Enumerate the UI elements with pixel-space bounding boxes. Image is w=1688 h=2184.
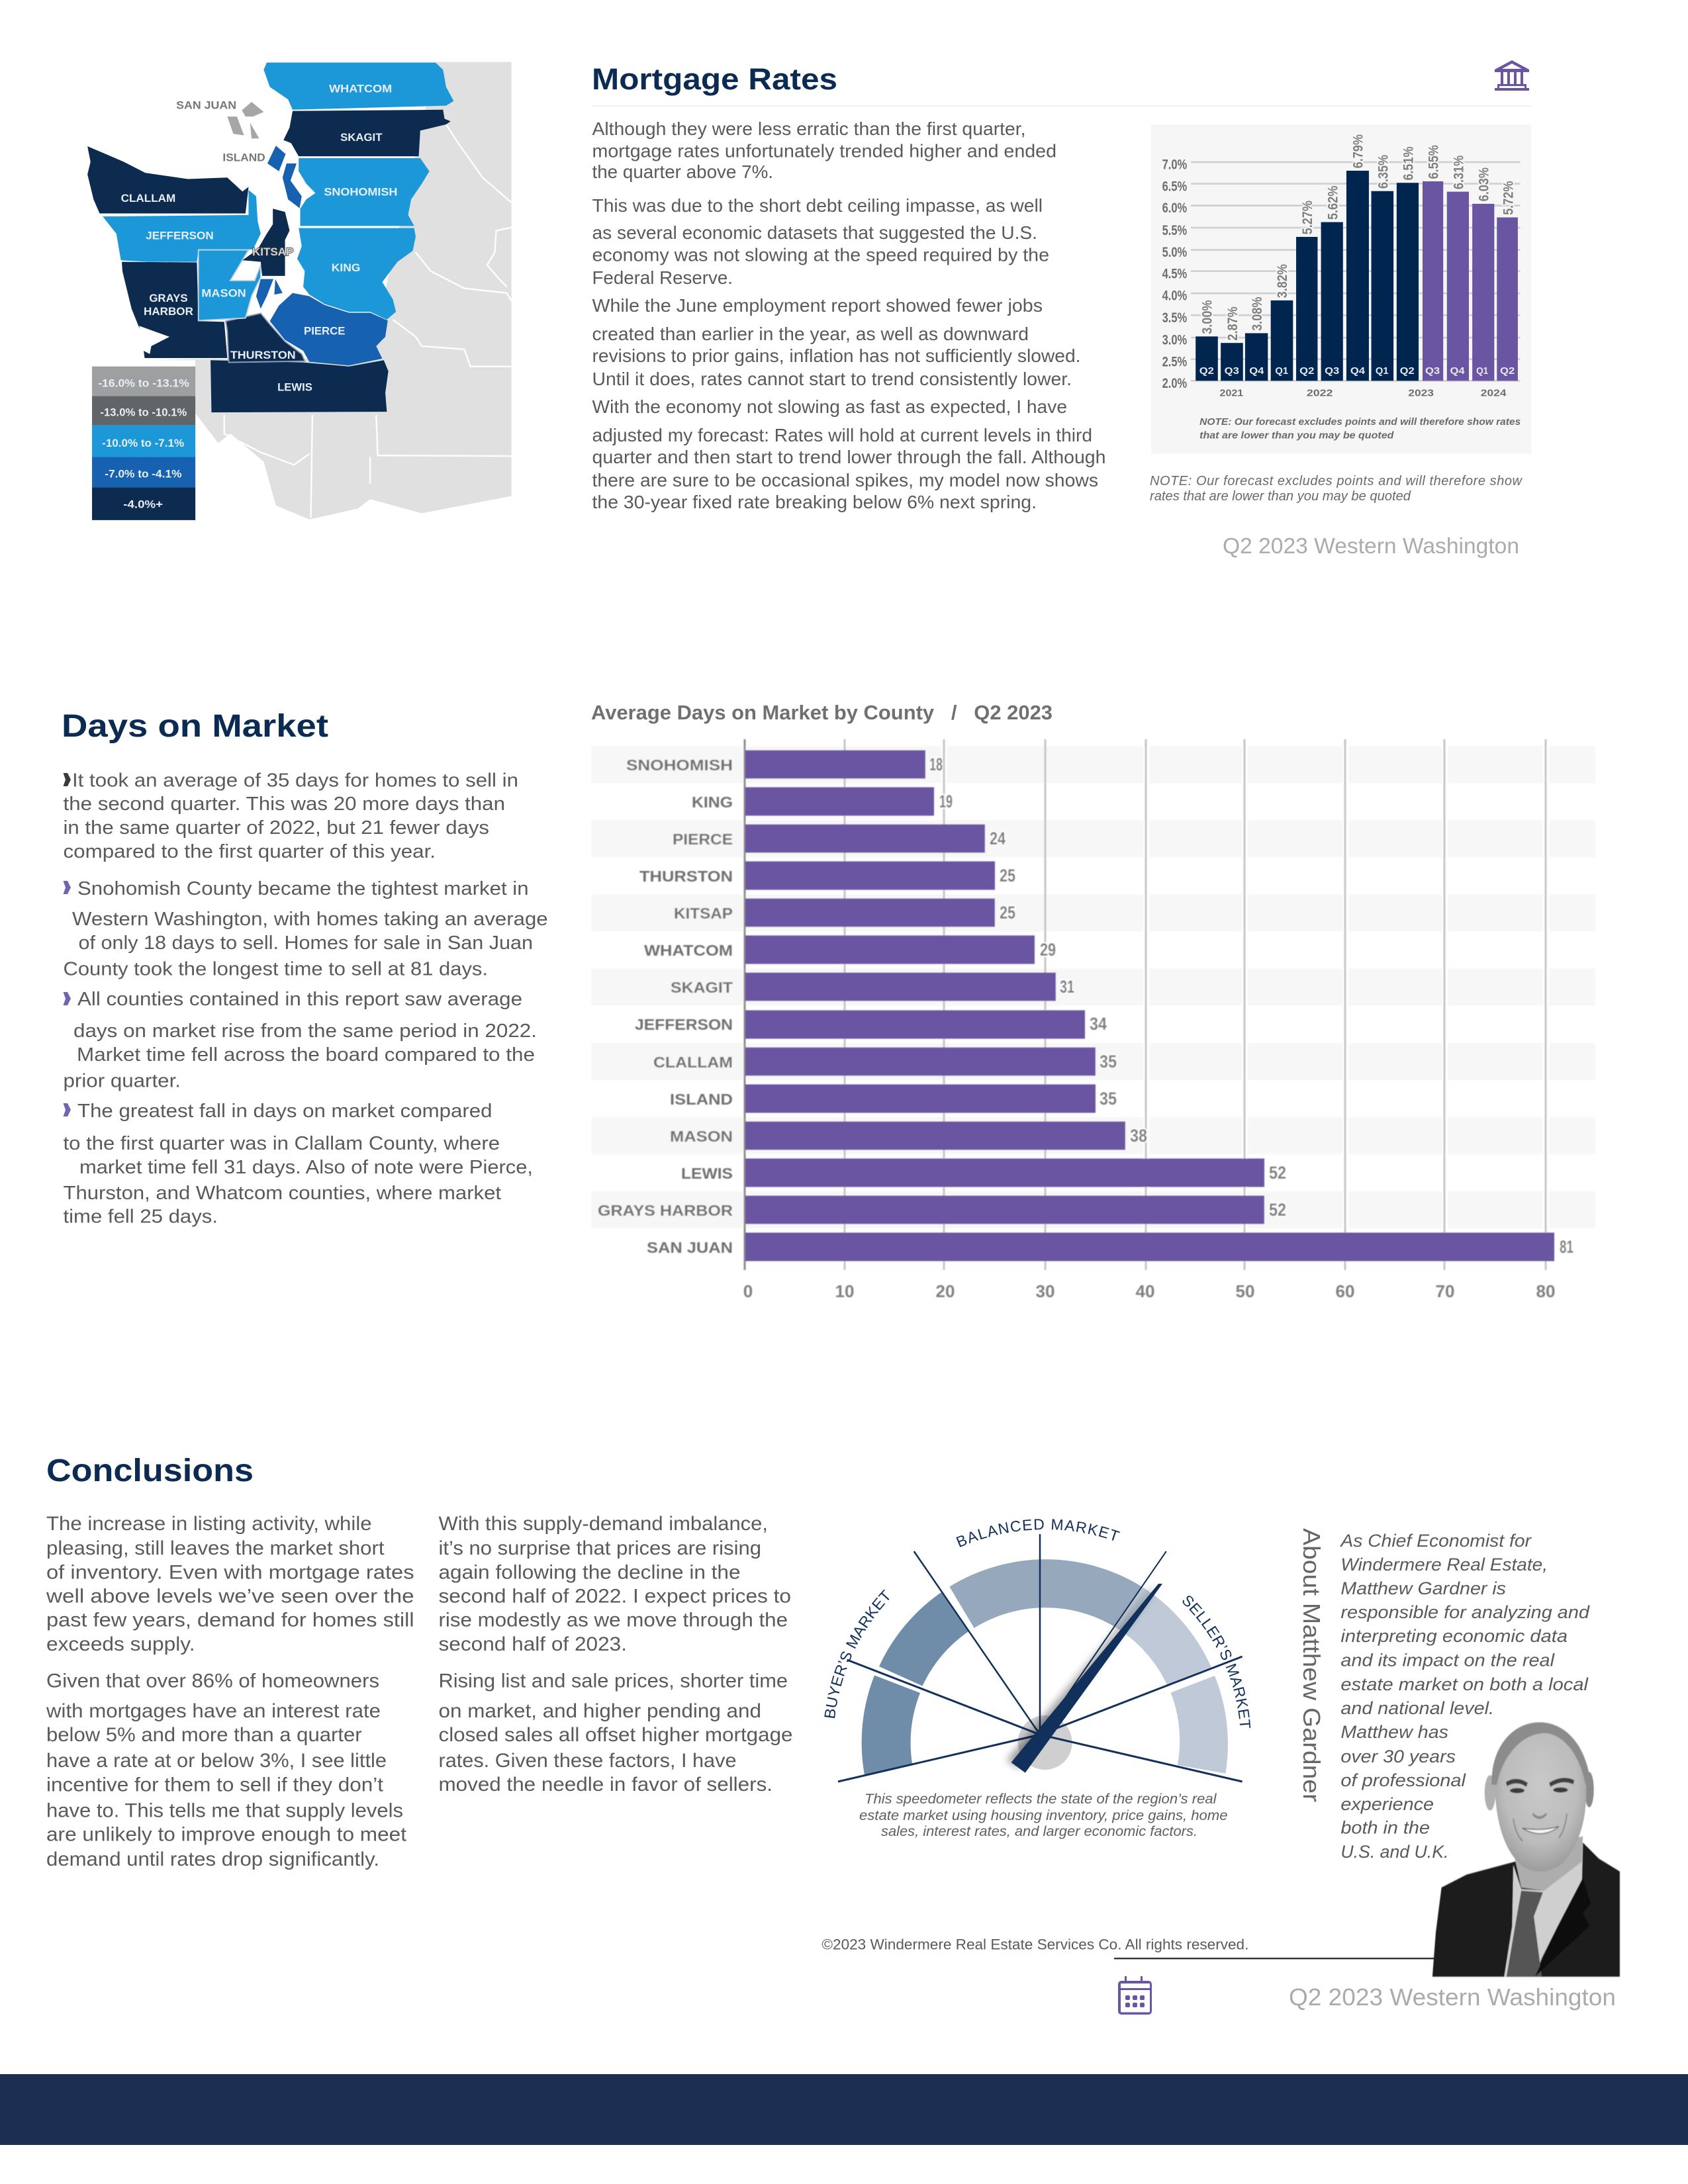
text block: about Matthew Gardner bio: experience [1340, 1794, 1434, 1814]
text block: about Matthew Gardner bio: responsible for analyzing and [1340, 1602, 1590, 1622]
map: Western Washington counties: -10.0% to -7.1% [102, 437, 184, 449]
chart: mortgage rate forecast bars: 6.51% [1400, 146, 1416, 181]
text block: about Matthew Gardner bio: and its impact on the real [1340, 1651, 1555, 1670]
footer bar [0, 2074, 1688, 2145]
map: Western Washington counties: KITSAP [252, 246, 293, 258]
map: Western Washington counties: JEFFERSON [146, 229, 214, 242]
chart: mortgage rate forecast bars: Q2 [1400, 365, 1415, 377]
text block: about Matthew Gardner bio: estate market on both a local [1340, 1674, 1589, 1694]
map: Western Washington counties: MASON [201, 287, 246, 300]
chart: mortgage rate forecast bars: that are lower than you may be quoted [1199, 430, 1394, 441]
bar chart: days on market by county: 31 [1060, 977, 1074, 997]
text block: conclusions left column: have a rate at or below 3%, I see little [46, 1750, 387, 1772]
chart title: Average Days on Market by County: Average Days on Market by County / Q2 2023 [591, 701, 1053, 724]
chart: mortgage rate forecast bars: 7.0% [1162, 158, 1187, 173]
chart: mortgage rate forecast bars: 2024 [1481, 388, 1507, 399]
text block: about Matthew Gardner bio: interpreting economic data [1340, 1626, 1568, 1646]
text block: conclusions left column: exceeds supply. [46, 1633, 195, 1655]
text block: about Matthew Gardner bio: Matthew Gardner is [1340, 1578, 1506, 1598]
text block: conclusions left column [46, 1513, 414, 1870]
chart: mortgage rate forecast bars: Q2 [1199, 365, 1214, 377]
map: Western Washington counties: WHATCOM [329, 82, 392, 95]
bar chart: days on market by county: 10 [835, 1281, 854, 1301]
chart: mortgage rate forecast bars: 3.5% [1162, 310, 1187, 326]
text block: days on market commentary: The greatest fall in days on market compared [77, 1101, 492, 1122]
text block: about Matthew Gardner bio: over 30 years [1340, 1747, 1456, 1766]
bar chart: days on market by county: 25 [1000, 866, 1015, 886]
text block: days on market commentary: to the first quarter was in Clallam County, where [64, 1133, 500, 1154]
bar chart: days on market by county: LEWIS [681, 1165, 733, 1182]
text block: mortgage rates commentary: created than earlier in the year, as well as downward [592, 324, 1029, 344]
chart: mortgage rate forecast bars: 2.5% [1162, 354, 1187, 370]
text block: conclusions left column: well above levels we’ve seen over the [46, 1586, 414, 1607]
text block: mortgage rates commentary: the quarter above 7%. [592, 161, 773, 182]
bar chart: days on market by county: 0 [743, 1281, 753, 1301]
bar chart: days on market by county: SNOHOMISH [626, 756, 733, 774]
bar chart: days on market by county: 20 [936, 1281, 955, 1301]
text block: mortgage rates commentary: as several economic datasets that suggested the U.S. [592, 222, 1037, 243]
chart: mortgage rate forecast bars: 2.0% [1162, 376, 1187, 391]
speedometer gauge: SELLER’S MARKET [1182, 1596, 1251, 1728]
bar chart: days on market by county: 25 [1000, 903, 1015, 923]
chart: mortgage rate forecast bars: 6.35% [1375, 155, 1391, 189]
bar chart: days on market by county: 29 [1040, 940, 1056, 960]
text block: about Matthew Gardner bio: Matthew has [1340, 1722, 1448, 1742]
text block: conclusions left column: are unlikely to improve enough to meet [46, 1824, 407, 1845]
icon: bank building [1495, 60, 1529, 91]
text block: conclusions left column: have to. This tells me that supply levels [46, 1800, 403, 1821]
heading: Conclusions: Conclusions [46, 1453, 254, 1488]
text block: conclusions right column: closed sales all offset higher mortgage [438, 1724, 793, 1746]
map: Western Washington counties: -4.0%+ [123, 498, 163, 511]
heading: Days on Market: Days on Market [62, 709, 328, 744]
heading: About Matthew Gardner (vertical): About Matthew Gardner [1298, 1528, 1325, 1802]
text block: conclusions left column: pleasing, still leaves the market short [46, 1537, 385, 1559]
text block: conclusions left column: demand until rates drop significantly. [46, 1848, 379, 1870]
text block: conclusions left column: past few years, demand for homes still [46, 1610, 414, 1631]
chart: mortgage rate forecast bars: 6.55% [1425, 145, 1441, 179]
chart: mortgage rate forecast bars: 3.0% [1162, 332, 1187, 348]
text block: conclusions right column: again following the decline in the [438, 1562, 740, 1583]
copyright line: ©2023 Windermere Real Estate Services Co. All rights reserved. [821, 1936, 1248, 1952]
bar chart: days on market by county: PIERCE [673, 831, 733, 848]
text block: about Matthew Gardner bio: As Chief Economist for [1339, 1531, 1532, 1551]
chart: mortgage rate forecast bars: 6.5% [1162, 179, 1187, 195]
bar chart: days on market by county: JEFFERSON [635, 1016, 733, 1033]
bar chart: days on market by county [591, 739, 1595, 1301]
chart: mortgage rate forecast bars: 2.87% [1224, 306, 1241, 341]
text block: days on market commentary: Western Washington, with homes taking an average [72, 909, 548, 930]
footer label: Q2 2023 Western Washington (top): Q2 2023 Western Washington [1223, 533, 1519, 558]
bar chart: days on market by county: 52 [1269, 1200, 1286, 1220]
text block: mortgage rates commentary: While the June employment report showed fewer jobs [592, 295, 1043, 316]
chart: mortgage rate forecast bars: 5.72% [1500, 181, 1516, 215]
text block: mortgage rates commentary: there are sure to be occasional spikes, my model now shows [592, 470, 1098, 490]
text block: mortgage rates commentary: With the economy not slowing as fast as expected, I have [592, 396, 1067, 417]
text block: days on market commentary: the second quarter. This was 20 more days than [64, 794, 505, 815]
map: Western Washington counties: CLALLAM [121, 192, 175, 205]
text block: mortgage rates commentary: the 30-year fixed rate breaking below 6% next spring. [592, 492, 1037, 512]
chart: mortgage rate forecast bars: Q2 [1500, 365, 1515, 377]
footer label: Q2 2023 Western Washington (bottom): Q2 2023 Western Washington [1289, 1983, 1616, 2011]
bar chart: days on market by county: 34 [1090, 1014, 1107, 1034]
chart: mortgage rate forecast bars: Q3 [1225, 365, 1239, 377]
text block: mortgage rates commentary: economy was not slowing at the speed required by the [592, 245, 1049, 265]
text block: days on market commentary: Snohomish County became the tightest market in [77, 878, 529, 899]
chart: mortgage rate forecast bars: 3.00% [1199, 300, 1215, 334]
map: Western Washington counties: LEWIS [277, 381, 312, 394]
chart: mortgage rate forecast bars: 3.82% [1274, 264, 1290, 298]
chart: mortgage rate forecast bars: NOTE: Our forecast excludes points and will therefore show rates [1199, 416, 1521, 428]
chart: mortgage rate forecast bars: 5.62% [1325, 186, 1340, 220]
map: Western Washington counties: HARBOR [144, 305, 193, 318]
bar chart: days on market by county: 19 [939, 792, 953, 811]
text block: conclusions right column: Rising list and sale prices, shorter time [438, 1670, 788, 1692]
chart: mortgage rate forecast bars: Q1 [1376, 365, 1389, 377]
chart: mortgage rate forecast bars: 5.5% [1162, 223, 1187, 238]
bar chart: days on market by county: 50 [1236, 1281, 1254, 1301]
chart: mortgage rate forecast bars: Q4 [1350, 365, 1365, 377]
bar chart: days on market by county: 38 [1130, 1126, 1147, 1146]
text block: about Matthew Gardner bio: and national level. [1340, 1698, 1494, 1718]
text block: days on market commentary: All counties contained in this report saw average [77, 989, 522, 1010]
bar chart: days on market by county: ISLAND [670, 1091, 733, 1108]
bar chart: days on market by county: 30 [1036, 1281, 1055, 1301]
note under forecast chart: rates that are lower than you may be quoted [1150, 489, 1411, 504]
text block: days on market commentary: Market time fell across the board compared to the [77, 1044, 535, 1066]
chart: mortgage rate forecast bars: 6.03% [1476, 167, 1491, 201]
text block: days on market commentary: compared to the first quarter of this year. [64, 841, 436, 862]
text block: conclusions left column: The increase in listing activity, while [46, 1513, 372, 1535]
map: Western Washington counties [87, 62, 512, 520]
bar chart: days on market by county: MASON [670, 1128, 733, 1145]
caption: speedometer explanation: This speedometer reflects the state of the region’s real [865, 1792, 1217, 1807]
text block: mortgage rates commentary: quarter and then start to trend lower through the fall. Although [592, 447, 1105, 467]
text block: mortgage rates commentary: Although they were less erratic than the first quarter, [592, 118, 1026, 139]
bar chart: days on market by county: 35 [1100, 1052, 1117, 1071]
text block: about Matthew Gardner bio: both in the [1340, 1817, 1430, 1837]
text block: days on market commentary: County took the longest time to sell at 81 days. [64, 959, 488, 980]
text block: days on market commentary: market time fell 31 days. Also of note were Pierce, [79, 1157, 533, 1178]
caption: speedometer explanation: estate market using housing inventory, price gains, home [859, 1808, 1227, 1823]
bar chart: days on market by county: 52 [1269, 1163, 1286, 1183]
text block: conclusions right column: second half of 2023. [438, 1633, 627, 1655]
bar chart: days on market by county: SAN JUAN [647, 1239, 733, 1256]
map: Western Washington counties: ISLAND [222, 151, 265, 164]
chart: mortgage rate forecast bars: 4.5% [1162, 266, 1187, 282]
chart: mortgage rate forecast bars: Q3 [1425, 365, 1440, 377]
text block: mortgage rates commentary: adjusted my forecast: Rates will hold at current levels in third [592, 425, 1092, 445]
chart: mortgage rate forecast bars [1151, 124, 1531, 454]
text block: conclusions left column: of inventory. Even with mortgage rates [46, 1562, 414, 1583]
bar chart: days on market by county: WHATCOM [644, 942, 733, 959]
speedometer gauge: BUYER’S MARKET [824, 1590, 890, 1718]
bar chart: days on market by county: SKAGIT [671, 979, 733, 996]
chart: mortgage rate forecast bars: Q3 [1325, 365, 1339, 377]
chart: mortgage rate forecast bars: Q1 [1275, 365, 1288, 377]
note under forecast chart [1150, 474, 1523, 504]
bar chart: days on market by county: CLALLAM [653, 1054, 733, 1071]
text block: conclusions right column: rates. Given these factors, I have [438, 1750, 736, 1772]
text block: conclusions right column: it’s no surprise that prices are rising [438, 1537, 761, 1559]
bar chart: days on market by county: GRAYS HARBOR [598, 1202, 733, 1219]
text block: days on market commentary: days on market rise from the same period in 2022. [73, 1021, 537, 1042]
text block: conclusions left column: incentive for them to sell if they don’t [46, 1774, 384, 1796]
text block: conclusions right column: rise modestly as we move through the [438, 1610, 788, 1631]
text block: days on market commentary: It took an average of 35 days for homes to sell in [72, 770, 518, 792]
text block: conclusions right column: second half of 2022. I expect prices to [438, 1586, 791, 1607]
text block: days on market commentary: prior quarter. [64, 1071, 181, 1092]
caption: speedometer explanation: sales, interest rates, and larger economic factors. [881, 1824, 1197, 1839]
bar chart: days on market by county: THURSTON [639, 868, 733, 885]
map: Western Washington counties: -13.0% to -10.1% [100, 406, 187, 418]
bar chart: days on market by county: 70 [1436, 1281, 1454, 1301]
bar chart: days on market by county: 80 [1536, 1281, 1555, 1301]
text block: about Matthew Gardner bio: Windermere Real Estate, [1340, 1555, 1548, 1574]
caption: speedometer explanation [859, 1792, 1227, 1839]
text block: conclusions left column: with mortgages have an interest rate [46, 1700, 381, 1722]
chart: mortgage rate forecast bars: 2021 [1220, 388, 1243, 399]
bar chart: days on market by county: KITSAP [674, 905, 733, 922]
text block: mortgage rates commentary: Until it does, rates cannot start to trend consistently lower. [592, 369, 1072, 389]
chart: mortgage rate forecast bars: 4.0% [1162, 288, 1187, 304]
text block: conclusions right column: on market, and higher pending and [438, 1700, 761, 1722]
text block: about Matthew Gardner bio [1339, 1531, 1590, 1862]
chart: mortgage rate forecast bars: 6.0% [1162, 201, 1187, 216]
map: Western Washington counties: -16.0% to -13.1% [98, 377, 189, 389]
map: Western Washington counties: -7.0% to -4.1% [105, 467, 182, 480]
chart: mortgage rate forecast bars: 2023 [1408, 388, 1434, 399]
map: Western Washington counties: SNOHOMISH [324, 185, 397, 199]
speedometer gauge [824, 1519, 1251, 1783]
text block: conclusions right column: With this supply-demand imbalance, [438, 1513, 768, 1535]
bar chart: days on market by county: 18 [929, 754, 943, 774]
bar chart: days on market by county: KING [692, 794, 733, 811]
chart: mortgage rate forecast bars: Q4 [1450, 365, 1465, 377]
chart: mortgage rate forecast bars: 6.31% [1450, 156, 1466, 189]
text block: conclusions right column [438, 1513, 793, 1796]
bar chart: days on market by county: 60 [1336, 1281, 1354, 1301]
chart: mortgage rate forecast bars: 5.27% [1299, 201, 1315, 234]
text block: days on market commentary: time fell 25 days. [64, 1206, 218, 1228]
portrait: Matthew Gardner [1432, 1722, 1620, 1977]
map: Western Washington counties: SAN JUAN [176, 99, 236, 111]
text block: mortgage rates commentary: Federal Reserve. [592, 267, 733, 288]
text block: days on market commentary: of only 18 days to sell. Homes for sale in San Juan [78, 933, 533, 954]
heading: Mortgage Rates: Mortgage Rates [592, 62, 837, 96]
map: Western Washington counties: KING [332, 261, 360, 274]
chart: mortgage rate forecast bars: Q1 [1476, 365, 1488, 377]
text block: mortgage rates commentary: revisions to prior gains, inflation has not sufficiently slowed. [592, 345, 1080, 366]
bar chart: days on market by county: 24 [990, 829, 1006, 848]
chart: mortgage rate forecast bars: 5.0% [1162, 245, 1187, 260]
text block: conclusions right column: moved the needle in favor of sellers. [438, 1774, 773, 1796]
chart: mortgage rate forecast bars: Q2 [1299, 365, 1314, 377]
text block: conclusions left column: below 5% and more than a quarter [46, 1724, 362, 1746]
text block: days on market commentary [64, 770, 548, 1228]
map: Western Washington counties: GRAYS [149, 292, 188, 304]
chart: mortgage rate forecast bars: 2022 [1307, 388, 1333, 399]
text block: about Matthew Gardner bio: of professional [1340, 1770, 1466, 1790]
map: Western Washington counties: SKAGIT [340, 131, 383, 144]
text block: conclusions left column: Given that over 86% of homeowners [46, 1670, 379, 1692]
text block: mortgage rates commentary [592, 118, 1105, 512]
chart: mortgage rate forecast bars: 6.79% [1350, 134, 1366, 168]
text block: mortgage rates commentary: This was due to the short debt ceiling impasse, as well [592, 195, 1043, 216]
bar chart: days on market by county: 35 [1100, 1089, 1117, 1109]
text block: mortgage rates commentary: mortgage rates unfortunately trended higher and ended [592, 140, 1056, 161]
bar chart: days on market by county: 81 [1560, 1237, 1573, 1257]
map: Western Washington counties: THURSTON [230, 349, 296, 361]
text block: about Matthew Gardner bio: U.S. and U.K. [1340, 1842, 1448, 1862]
note under forecast chart: NOTE: Our forecast excludes points and will therefore show [1150, 474, 1523, 488]
bar chart: days on market by county: 40 [1136, 1281, 1154, 1301]
map: Western Washington counties: PIERCE [304, 324, 345, 338]
speedometer gauge: BALANCED MARKET [956, 1519, 1120, 1547]
chart: mortgage rate forecast bars: Q4 [1249, 365, 1264, 377]
text block: days on market commentary: in the same quarter of 2022, but 21 fewer days [64, 817, 489, 839]
text block: days on market commentary: Thurston, and Whatcom counties, where market [64, 1183, 501, 1204]
chart: mortgage rate forecast bars: 3.08% [1248, 297, 1265, 331]
icon: calendar [1118, 1976, 1152, 2015]
